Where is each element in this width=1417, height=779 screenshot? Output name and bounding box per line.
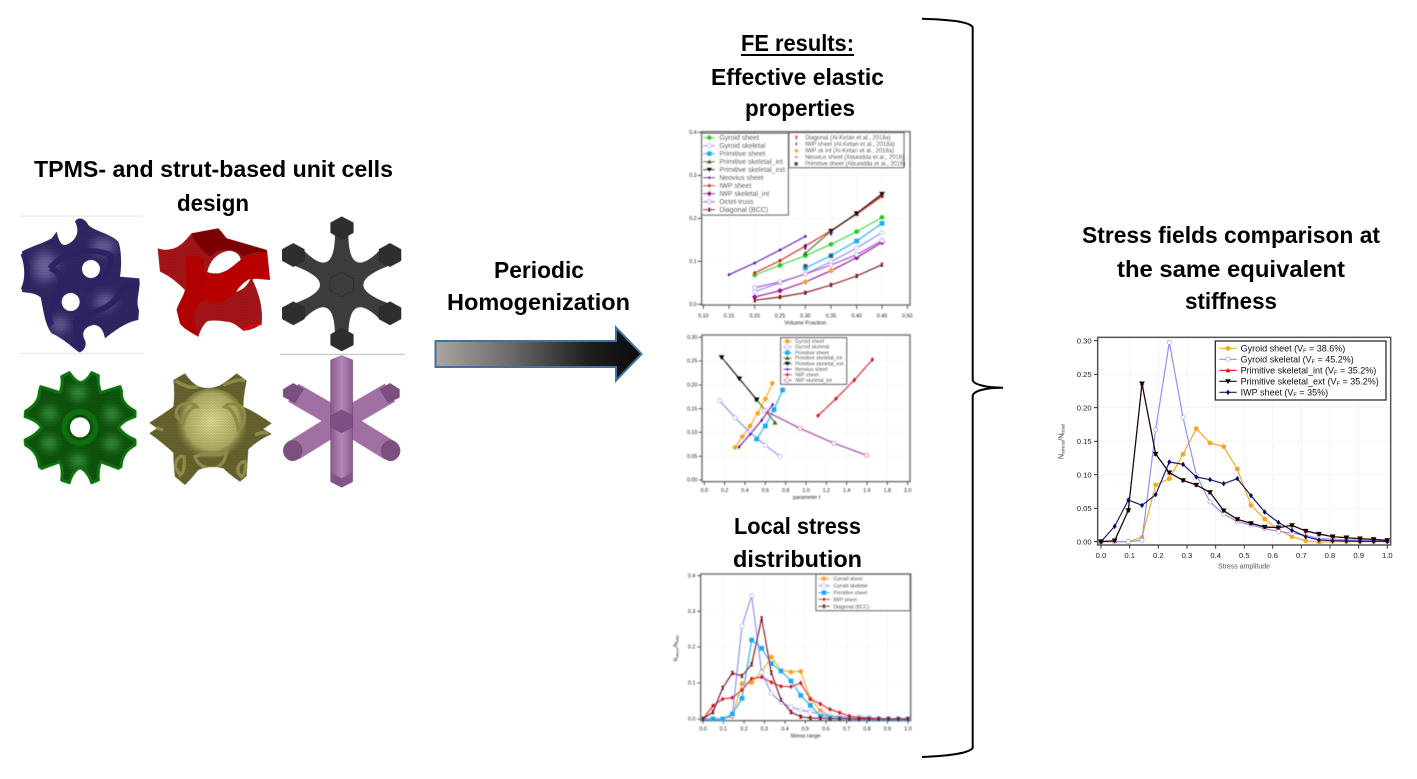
chart: effective modulus vs parameter t: 2.0 (904, 488, 911, 494)
chart: effective modulus vs volume fraction: 0.45 (877, 313, 887, 319)
legend: literature data (789, 133, 905, 168)
chart: effective modulus vs volume fraction: 0.25 (775, 313, 785, 319)
chart: local stress distribution: 0.3 (688, 609, 695, 615)
heading: unit cells design (34, 156, 393, 216)
legend: simulated series: IWP skeletal_int (719, 191, 769, 198)
chart: local stress distribution: 0.5 (802, 727, 809, 733)
chart: effective modulus vs volume fraction: 0.50 (902, 313, 913, 319)
heading: stress fields comparison: stiffness (1185, 288, 1277, 314)
chart: effective modulus vs parameter t: 0.4 (741, 488, 749, 494)
chart: effective modulus vs volume fraction: 0.3 (689, 173, 697, 179)
chart: stress amplitude comparison: 0.4 (1210, 551, 1222, 560)
panel: unit cell renderings (17, 213, 405, 487)
chart: effective modulus vs parameter t: 0.8 (782, 488, 789, 494)
legend: literature data: IWP sk int (Al-Ketan et al., 2018a) (805, 149, 894, 155)
legend: volume fractions (1215, 341, 1386, 400)
chart: local stress distribution: 1.0 (904, 727, 912, 733)
chart: stress amplitude comparison: 1.0 (1382, 551, 1393, 560)
legend: volume fractions: Gyroid skeletal (V (1241, 354, 1312, 364)
legend: volume fractions: F (1337, 382, 1341, 388)
chart: stress amplitude comparison: total (1061, 424, 1067, 434)
chart: effective modulus vs parameter t: 1.8 (884, 488, 891, 494)
chart: effective modulus vs volume fraction: 0.2 (689, 216, 697, 222)
bracket: grouping FE results (922, 19, 1003, 757)
chart: stress amplitude comparison: 0.0 (1096, 551, 1106, 560)
heading: local stress distribution: Local stress (734, 513, 861, 539)
chart: local stress distribution: 0.0 (688, 717, 695, 723)
chart: effective modulus vs parameter t: 0.25 (687, 359, 697, 365)
chart: effective modulus vs parameter t: 1.2 (823, 488, 830, 494)
legend: volume fractions: IWP sheet (V (1241, 387, 1293, 397)
legend: series (781, 338, 847, 384)
chart: local stress distribution: 0.9 (884, 727, 891, 733)
chart: local stress distribution: Stress range (790, 734, 820, 740)
chart: effective modulus vs volume fraction: 0.20 (749, 313, 760, 319)
chart: stress amplitude comparison: stress (1061, 440, 1067, 454)
chart: local stress distribution: 0.2 (740, 727, 748, 733)
chart: effective modulus vs volume fraction: 0.10 (698, 313, 709, 319)
legend: volume fractions: = 35.2%) (1340, 376, 1379, 386)
heading: FE results (711, 30, 884, 121)
legend: series: IWP sheet (795, 372, 819, 378)
chart: local stress distribution (673, 573, 912, 740)
legend: volume fractions: F (1312, 360, 1316, 366)
legend: literature data: Neovius sheet (Abueidda et al., 2016) (805, 155, 904, 161)
chart: stress amplitude comparison: 0.8 (1325, 551, 1335, 560)
heading: unit cells design: design (177, 190, 249, 216)
chart: effective modulus vs parameter t: 0.30 (687, 335, 697, 341)
chart: stress amplitude comparison: 0.15 (1077, 437, 1092, 446)
legend: simulated series: Gyroid sheet (719, 135, 759, 142)
chart: effective modulus vs volume fraction: 0.30 (800, 313, 811, 319)
heading: FE results: FE results: (741, 30, 854, 56)
legend: series: Primitive sheet (795, 350, 829, 356)
heading: periodic homogenization: Homogenization (447, 289, 630, 315)
legend: volume fractions: Gyroid sheet (V (1241, 343, 1303, 353)
chart: effective modulus vs parameter t: 0.0 (701, 488, 708, 494)
chart: stress amplitude comparison: /N (1058, 434, 1065, 441)
legend: simulated series (702, 133, 788, 215)
legend: series: Gyroid skeletal (833, 584, 867, 590)
chart: effective modulus vs parameter t: 0.20 (687, 383, 697, 389)
chart: stress amplitude comparison: 0.25 (1077, 370, 1092, 379)
arrow: gradient arrow (436, 328, 642, 380)
chart: stress amplitude comparison: 0.05 (1077, 504, 1092, 513)
legend: simulated series: IWP sheet (719, 183, 751, 190)
legend: series: Primitive skeletal_int (795, 356, 843, 362)
heading: stress fields comparison: Stress fields comparison at (1082, 222, 1380, 248)
heading: stress fields comparison: the same equivalent (1117, 256, 1345, 282)
chart: stress amplitude comparison: 0.9 (1353, 551, 1364, 560)
legend: series: Gyroid sheet (795, 339, 825, 345)
chart: stress amplitude comparison: 0.7 (1296, 551, 1307, 560)
chart: effective modulus vs parameter t: 0.15 (687, 406, 697, 412)
chart: effective modulus vs parameter t: 1.4 (843, 488, 850, 494)
icon: octet strut cell (purple) (283, 356, 400, 487)
chart: effective modulus vs volume fraction (689, 130, 913, 327)
chart: stress amplitude comparison: 0.1 (1124, 551, 1135, 560)
chart: local stress distribution: stress (675, 647, 679, 657)
chart: effective modulus vs parameter t (687, 335, 911, 501)
chart: local stress distribution: 0.3 (761, 727, 768, 733)
legend: series: Primitive skeletal_ext (795, 361, 844, 367)
icon: primitive skeletal cell (green) (20, 370, 140, 485)
chart: local stress distribution: 0.1 (720, 727, 727, 733)
chart: local stress distribution: N (673, 657, 679, 661)
chart: stress amplitude comparison (1058, 336, 1393, 571)
legend: volume fractions: Primitive skeletal_int (V (1241, 365, 1334, 375)
legend: series: Diagonal (BCC) (833, 604, 870, 610)
heading: periodic homogenization (447, 257, 630, 315)
legend: series: IWP sheet (833, 597, 858, 603)
legend: series: Gyroid sheet (833, 577, 863, 583)
chart: effective modulus vs volume fraction: 0.1 (689, 259, 697, 265)
chart: effective modulus vs volume fraction: 0.35 (826, 313, 836, 319)
chart: stress amplitude comparison: 0.20 (1077, 403, 1092, 412)
legend: volume fractions: = 35.2%) (1338, 365, 1376, 375)
legend: volume fractions: F (1293, 393, 1297, 399)
chart: effective modulus vs volume fraction: 0.40 (851, 313, 862, 319)
heading: local stress distribution (733, 513, 862, 572)
chart: local stress distribution: 0.4 (781, 727, 789, 733)
legend: volume fractions: F (1334, 371, 1338, 377)
heading: local stress distribution: distribution (733, 546, 862, 572)
legend: series: Gyroid skeletal (795, 345, 829, 351)
chart: local stress distribution: 0.1 (688, 681, 695, 687)
chart: effective modulus vs volume fraction: 0.0 (689, 302, 697, 308)
chart: effective modulus vs parameter t: 1.0 (802, 488, 810, 494)
legend: simulated series: Neovius sheet (719, 175, 764, 182)
chart: local stress distribution: 0.0 (699, 727, 707, 733)
chart: stress amplitude comparison: 0.2 (1153, 551, 1164, 560)
chart: local stress distribution: 0.4 (688, 573, 695, 579)
legend: simulated series: Gyroid skeletal (719, 143, 766, 150)
legend: volume fractions: F (1303, 349, 1307, 355)
heading: FE results: properties (745, 95, 855, 121)
chart: stress amplitude comparison: 0.30 (1077, 336, 1092, 345)
legend: volume fractions: Primitive skeletal_ext (V (1241, 376, 1337, 386)
chart: effective modulus vs volume fraction: Volume Fraction (784, 321, 826, 327)
icon: gyroid sheet cell (purple) (20, 218, 140, 352)
chart: stress amplitude comparison: 0.10 (1077, 470, 1092, 479)
chart: stress amplitude comparison: 0.3 (1182, 551, 1192, 560)
chart: local stress distribution: 0.7 (843, 727, 850, 733)
legend: volume fractions: = 45.2%) (1315, 354, 1354, 364)
legend: series: Primitive sheet (833, 591, 868, 597)
legend: series: Neovius sheet (795, 367, 828, 373)
legend: literature data: IWP sheet (Al-Ketan et al., 2018a) (805, 142, 895, 148)
chart: effective modulus vs parameter t: 1.6 (863, 488, 871, 494)
icon: neovius cell (olive) (147, 370, 275, 487)
heading: stress fields comparison (1082, 222, 1380, 314)
legend: simulated series: Primitive skeletal_int (719, 159, 783, 166)
chart: effective modulus vs parameter t: 0.05 (687, 454, 697, 460)
chart: stress amplitude comparison: Stress amplitude (1218, 564, 1270, 571)
chart: effective modulus vs parameter t: parameter t (793, 495, 821, 501)
chart: effective modulus vs parameter t: 0.10 (687, 430, 697, 436)
legend: simulated series: Primitive skeletal_ext (719, 167, 785, 174)
chart: stress amplitude comparison: 0.6 (1267, 551, 1278, 560)
heading: periodic homogenization: Periodic (494, 257, 584, 283)
chart: stress amplitude comparison: 0.00 (1077, 537, 1092, 546)
legend: simulated series: Primitive sheet (719, 151, 765, 158)
chart: effective modulus vs parameter t: 0.2 (721, 488, 728, 494)
chart: local stress distribution: 0.2 (688, 645, 695, 651)
icon: IWP strut cell (dark grey) (282, 217, 401, 351)
chart: effective modulus vs volume fraction: 0.4 (689, 130, 697, 136)
legend: volume fractions: = 35%) (1297, 387, 1328, 397)
chart: effective modulus vs parameter t: 0.6 (762, 488, 769, 494)
legend: series: IWP skeletal_int (795, 378, 832, 384)
chart: local stress distribution: 0.8 (863, 727, 871, 733)
icon: primitive sheet cell (red) (158, 228, 270, 337)
chart: local stress distribution: total (675, 635, 679, 642)
legend: literature data: Diagonal (Al-Ketan et al., 2018a) (805, 135, 891, 141)
legend: series (816, 574, 910, 611)
chart: local stress distribution: 0.6 (822, 727, 830, 733)
legend: volume fractions: = 38.6%) (1307, 343, 1345, 353)
legend: literature data: Primitive sheet (Abueidda et al., 2016) (805, 162, 905, 168)
legend: simulated series: Diagonal (BCC) (719, 207, 768, 214)
chart: effective modulus vs volume fraction: 0.15 (724, 313, 734, 319)
heading: unit cells design: TPMS- and strut-based unit cells (34, 156, 393, 182)
chart: stress amplitude comparison: N (1058, 454, 1065, 459)
heading: FE results: Effective elastic (711, 64, 884, 90)
chart: effective modulus vs parameter t: 0.00 (687, 478, 697, 484)
chart: local stress distribution: /N (673, 642, 679, 648)
legend: simulated series: Octet-truss (719, 199, 754, 206)
chart: stress amplitude comparison: 0.5 (1239, 551, 1250, 560)
